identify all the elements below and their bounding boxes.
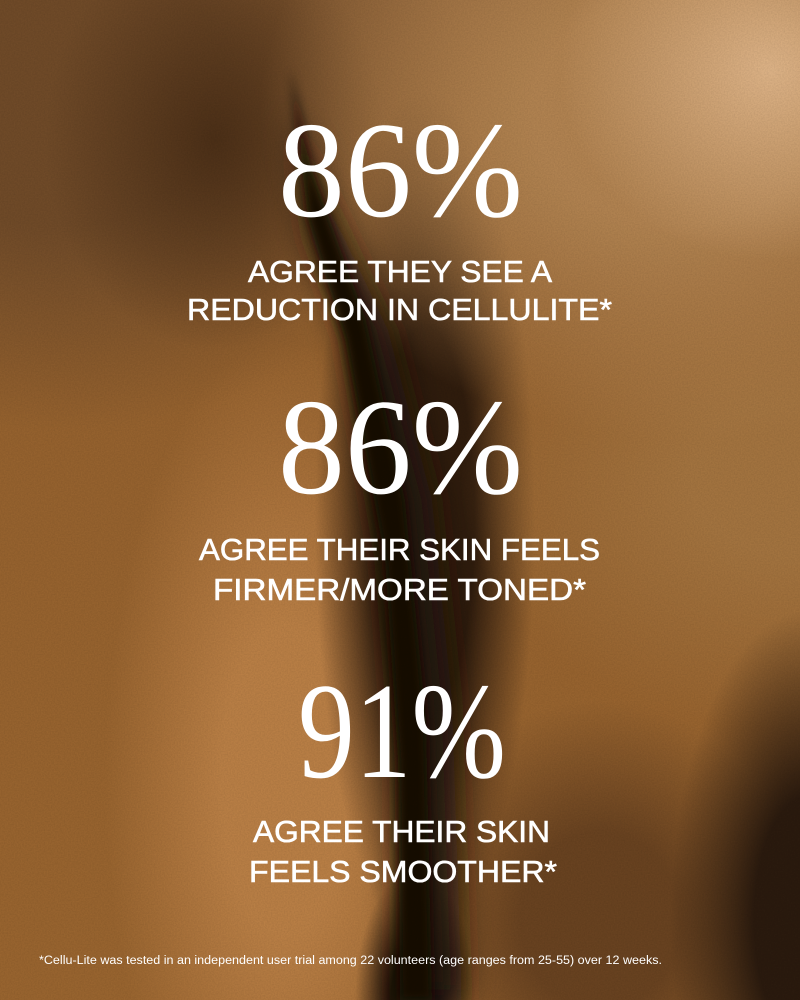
figure: 86%: 86%	[278, 94, 523, 246]
stat 1: 86% reduction in cellulite	[187, 94, 612, 327]
stat 3: 91% smoother	[249, 655, 557, 889]
label: firmer and more toned: AGREE THEIR SKIN FEELS	[199, 532, 600, 567]
label: smoother: AGREE THEIR SKIN	[253, 814, 550, 849]
figure: 86%: 86%	[278, 371, 523, 523]
label: reduction in cellulite: AGREE THEY SEE A	[248, 254, 552, 289]
label: firmer and more toned: FIRMER/MORE TONED*	[213, 572, 586, 607]
footnote: *Cellu-Lite was tested in an independent user trial among 22 volunteers (age ranges from 25-55) over 12 weeks.	[39, 955, 662, 967]
label: reduction in cellulite	[187, 254, 612, 327]
label: reduction in cellulite: REDUCTION IN CELLULITE*	[187, 292, 612, 327]
label: smoother	[249, 814, 557, 889]
stat 2: 86% firmer	[199, 371, 600, 607]
label: firmer and more toned	[199, 532, 600, 607]
figure: 91%: 91%	[298, 655, 506, 807]
label: smoother: FEELS SMOOTHER*	[249, 854, 557, 889]
